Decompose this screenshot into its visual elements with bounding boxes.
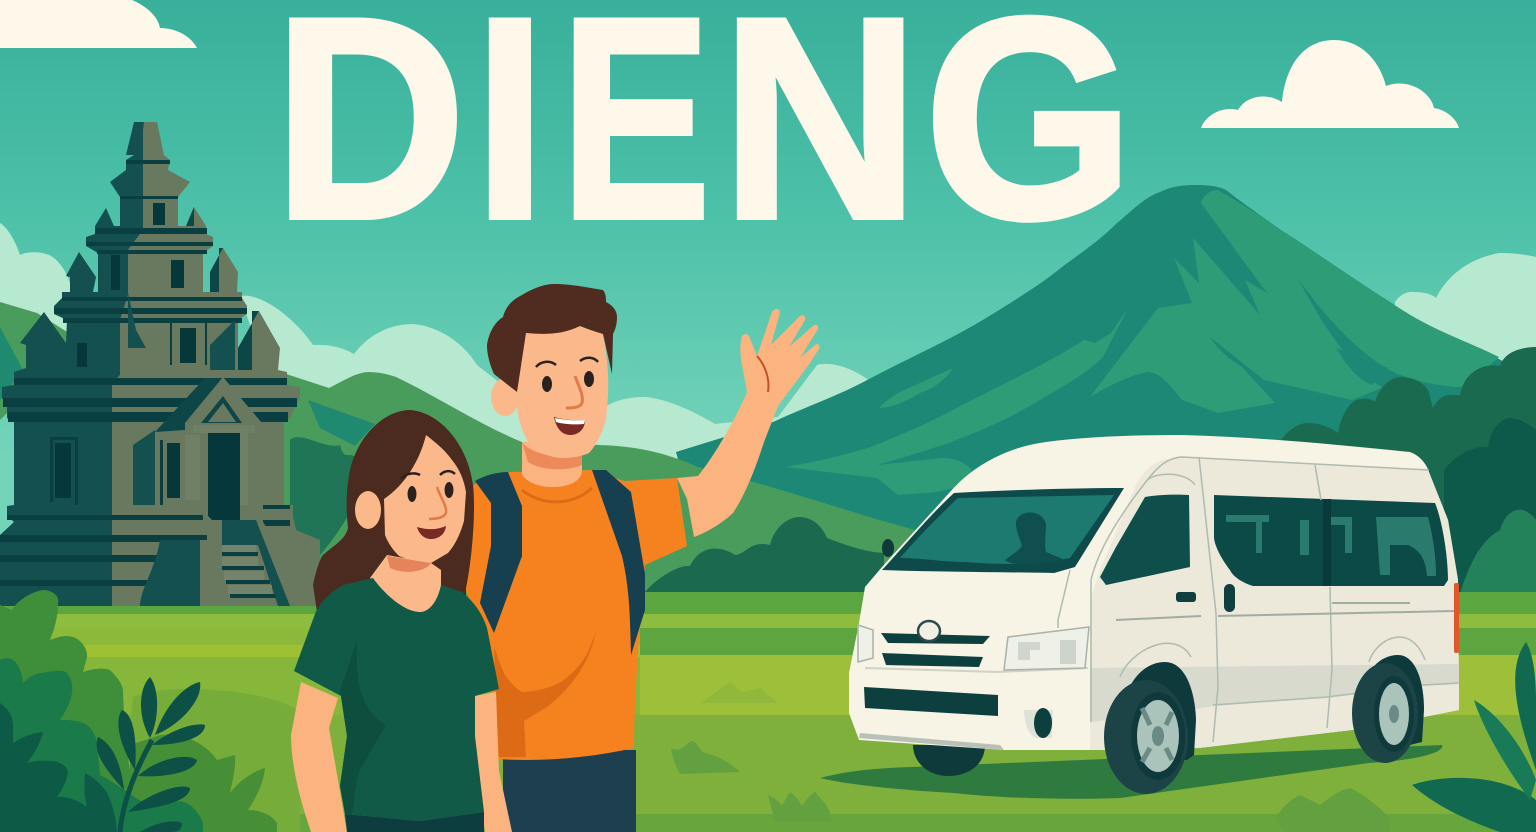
title — [274, 0, 1134, 279]
backpack left strap — [475, 472, 522, 633]
temple dark bands — [0, 160, 297, 586]
temple shaded spires — [186, 207, 259, 370]
splitter — [859, 733, 1004, 750]
cloud: centre horizon — [240, 296, 875, 470]
man legs — [503, 750, 636, 832]
woman eyes — [408, 482, 454, 502]
van shadow — [820, 745, 1442, 799]
man mouth — [554, 417, 585, 435]
temple window frames — [50, 322, 207, 505]
woman face — [384, 435, 466, 563]
woman ear — [355, 491, 381, 529]
woman green shirt — [294, 578, 499, 821]
temple shadow patches — [126, 122, 235, 606]
mid bush — [0, 658, 203, 832]
dark bush — [0, 703, 117, 832]
bumper vent — [864, 687, 998, 716]
headlight — [1004, 627, 1089, 670]
badge — [918, 621, 940, 641]
man raised arm and hand — [677, 309, 820, 537]
woman arms — [291, 682, 512, 832]
back mound — [120, 689, 300, 832]
sky background — [0, 0, 1536, 620]
palm crease — [757, 356, 768, 392]
fuel flap handle — [1224, 584, 1235, 612]
cloud: top right — [1201, 40, 1459, 128]
tail light — [1454, 583, 1459, 653]
temple — [0, 122, 320, 606]
temple shaded side — [0, 130, 143, 606]
backpack right strap — [592, 470, 645, 655]
side mirror — [882, 539, 894, 557]
neck shadow — [387, 556, 431, 572]
window seats — [1226, 515, 1436, 576]
cloud: top left — [0, 0, 197, 48]
cloud: left horizon — [0, 223, 70, 340]
man orange shirt — [464, 470, 687, 760]
temple porch roof — [155, 378, 223, 432]
right leafy bush — [130, 734, 277, 832]
woman — [291, 410, 512, 832]
mountain dark creases — [1297, 277, 1455, 400]
front wheel — [1104, 662, 1196, 794]
window pillar — [1323, 499, 1331, 586]
man eyebrows — [536, 358, 598, 367]
man head — [515, 326, 608, 458]
left rolling hills — [0, 302, 915, 600]
fog lamp — [1024, 710, 1053, 738]
woman hair — [313, 410, 474, 612]
volcano mountain — [676, 185, 1510, 540]
woman trousers — [345, 812, 484, 832]
temple stairs — [192, 500, 290, 606]
left foliage — [0, 590, 300, 832]
shirt shade — [340, 640, 386, 814]
fern — [97, 677, 205, 832]
man neck — [522, 442, 582, 487]
distant tree line — [645, 517, 884, 595]
mountain left strip — [786, 308, 1128, 495]
van — [849, 435, 1459, 794]
right foliage — [1412, 642, 1536, 832]
neck shadow — [522, 442, 582, 469]
van side panel — [1090, 457, 1459, 750]
right tree line — [1281, 347, 1536, 600]
mountain sliver — [879, 368, 953, 408]
van seams — [1058, 457, 1459, 742]
collar — [522, 488, 592, 502]
van lower shade — [1090, 664, 1459, 722]
mountain light slopes — [1090, 190, 1499, 413]
temple lit side — [112, 122, 320, 606]
driver silhouette — [1005, 512, 1065, 564]
door handle — [1176, 592, 1196, 602]
grass tufts — [671, 741, 740, 774]
temple windows — [55, 203, 196, 498]
cloud: right horizon — [1395, 253, 1536, 400]
van body — [849, 435, 1459, 750]
man nose — [566, 376, 582, 408]
woman mouth — [417, 526, 446, 539]
door window — [1100, 495, 1190, 585]
man with backpack — [464, 284, 820, 832]
shirt shading — [494, 632, 596, 757]
rear wheel — [1352, 655, 1424, 763]
far front wheel — [913, 745, 985, 776]
man hair — [487, 284, 617, 392]
man ear — [491, 378, 519, 416]
temple doorway — [208, 433, 240, 520]
bumper crease — [865, 668, 1088, 672]
light bush — [0, 590, 140, 832]
grille — [881, 633, 990, 667]
side windows — [1214, 495, 1448, 586]
side crease — [1116, 603, 1454, 620]
woman eyebrows — [401, 471, 455, 479]
clouds — [0, 0, 1536, 470]
windshield — [882, 488, 1124, 573]
woman neck — [370, 555, 441, 615]
meadow — [0, 592, 1536, 832]
woman nose — [429, 487, 446, 519]
man eyes — [542, 371, 594, 392]
